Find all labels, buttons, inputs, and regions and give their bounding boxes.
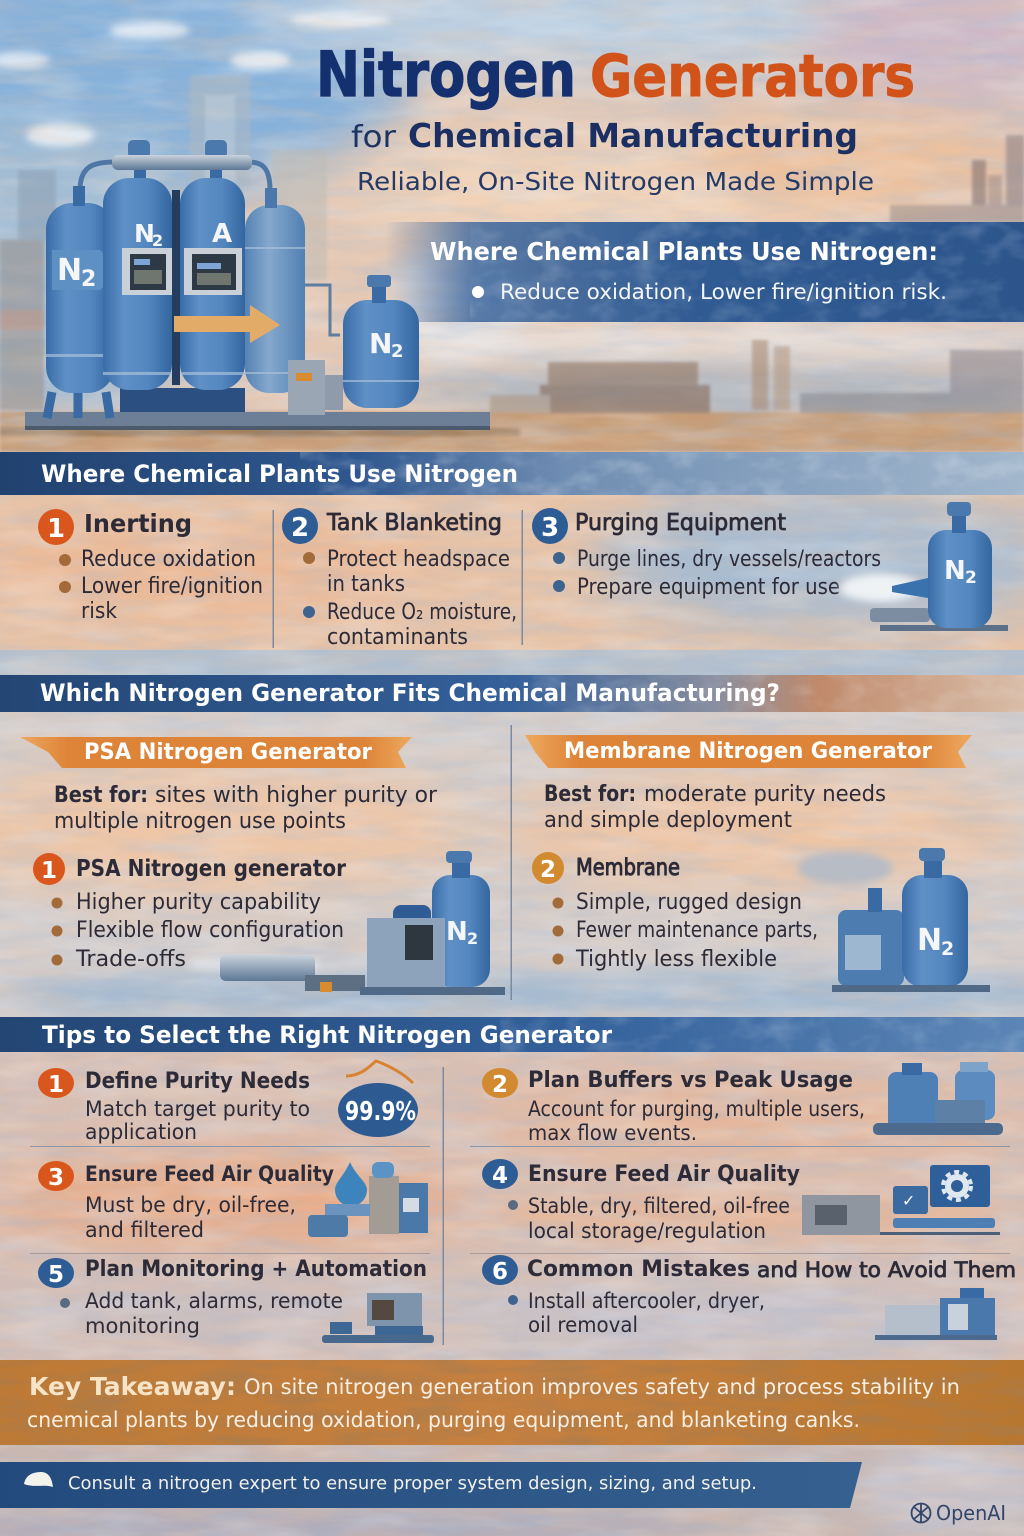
callout bullet: Reduce oxidation, Lower fire/ignition risk. [500, 280, 947, 304]
icon: controller and monitor [802, 1165, 1000, 1235]
title: Nitrogen [316, 38, 576, 111]
icon: monitoring unit [322, 1293, 434, 1343]
badge 2: 2 [291, 513, 309, 543]
tip 3: feed air: Ensure Feed Air Quality [85, 1162, 334, 1187]
tip 2: buffers [482, 1062, 1003, 1145]
icon: membrane unit: N [917, 923, 942, 958]
icon: PSA unit: 2 [467, 929, 478, 948]
icon: PSA generator skid [25, 140, 490, 430]
panel: purging equipment: Prepare equipment for use [577, 575, 840, 600]
best for: membrane: moderate purity needs [644, 782, 886, 807]
panel: tank blanketing: Protect headspace [327, 547, 510, 572]
section heading: tips [0, 1017, 1024, 1052]
panel: hero callout [385, 222, 1024, 322]
logo: OpenAI: OpenAI [936, 1501, 1006, 1525]
badge [38, 1068, 74, 1098]
section heading: tips: Tips to Select the Right Nitrogen Generator [42, 1021, 612, 1049]
panel: PSA generator [20, 737, 505, 995]
badge: 6 [492, 1259, 508, 1285]
control box [288, 285, 343, 415]
tip 3: feed air: Must be dry, oil-free, [85, 1193, 296, 1217]
badge 2 [282, 508, 318, 544]
small tank: 2 [391, 341, 404, 362]
panel: tank blanketing [282, 508, 517, 650]
tank 1: N [57, 253, 82, 288]
badge 3 [532, 508, 568, 544]
tip 4: feed air: Ensure Feed Air Quality [528, 1162, 800, 1187]
badge: 5 [48, 1262, 64, 1288]
tip 1: purity: Match target purity to [85, 1097, 310, 1121]
panel: membrane generator: Fewer maintenance parts, [576, 918, 818, 943]
best for: PSA: multiple nitrogen use points [54, 809, 346, 834]
badge: 3 [48, 1165, 64, 1191]
section heading: where plants use nitrogen: Where Chemical Plants Use Nitrogen [41, 460, 518, 488]
badge [482, 1159, 518, 1189]
tip 5: monitoring: Plan Monitoring + Automation [85, 1257, 427, 1282]
panel: membrane generator: Simple, rugged design [576, 890, 802, 915]
ribbon: PSA: PSA Nitrogen Generator [84, 740, 372, 765]
best for: PSA: sites with higher purity or [155, 783, 438, 808]
icon: aftercooler [875, 1288, 997, 1340]
section heading: which generator: Which Nitrogen Generator Fits Chemical Manufacturing? [40, 679, 780, 707]
tip 3: feed air: and filtered [85, 1218, 204, 1242]
badge [38, 1258, 74, 1288]
tip 2: buffers: Account for purging, multiple users, [528, 1097, 865, 1121]
subtitle: Chemical Manufacturing [408, 116, 858, 155]
icon: hard hat [24, 1472, 53, 1487]
panel: inerting [38, 509, 263, 624]
panel: membrane generator: Membrane [576, 855, 680, 881]
icon: membrane unit [797, 848, 990, 992]
icon: controller and monitor: ✓ [902, 1191, 915, 1210]
tip 5: monitoring: monitoring [85, 1314, 200, 1338]
section heading: where plants use nitrogen [0, 452, 1024, 495]
panel: footer note: Consult a nitrogen expert to ensure proper system design, sizing, and setup. [68, 1473, 757, 1494]
ribbon: membrane [525, 735, 972, 768]
icon: 99.9% badge: 99.9% [345, 1097, 416, 1127]
badge: 4 [492, 1163, 508, 1189]
best for: membrane: Best for: [544, 782, 636, 807]
badge [38, 1161, 74, 1191]
panel: footer note [0, 1462, 862, 1508]
tank 2: 2 [152, 231, 163, 250]
ribbon: membrane: Membrane Nitrogen Generator [564, 739, 932, 764]
panel: tank blanketing: contaminants [327, 625, 468, 650]
icon: purge tank: N [944, 556, 966, 586]
icon: PSA unit [190, 851, 505, 995]
panel: key takeaway: Key Takeaway: [29, 1372, 236, 1401]
tip 6: common mistakes: Install aftercooler, dryer, [528, 1289, 765, 1313]
panel: PSA generator: Flexible flow configuration [76, 918, 344, 943]
panel: tank blanketing: in tanks [327, 572, 405, 597]
tip 3: feed air [38, 1161, 428, 1242]
panel: tank blanketing: Reduce O₂ moisture, [327, 600, 517, 625]
callout heading: Where Chemical Plants Use Nitrogen: [430, 237, 938, 266]
gear [943, 1172, 971, 1200]
panel: inerting: risk [81, 599, 117, 624]
panel: inerting: Inerting [84, 509, 192, 538]
tip 5: monitoring [38, 1257, 434, 1343]
tip 6: common mistakes: and How to Avoid Them [757, 1258, 1016, 1282]
tip 6: common mistakes [482, 1255, 1016, 1340]
badge 2: 2 [540, 857, 556, 883]
tip 4: feed air: local storage/regulation [528, 1219, 766, 1243]
badge: 1 [48, 1072, 64, 1098]
panel: key takeaway: cnemical plants by reducing oxidation, purging equipment, and blanketing canks. [27, 1408, 860, 1432]
panel: purging equipment [532, 502, 1008, 631]
clouds [0, 12, 390, 147]
tip 6: common mistakes: Common Mistakes [527, 1257, 750, 1282]
panel: PSA generator: PSA Nitrogen generator [76, 856, 347, 882]
panel: PSA generator: Trade-offs [75, 947, 186, 972]
tank 1 [46, 186, 120, 393]
panel: purging equipment: Purge lines, dry vessels/reactors [577, 547, 881, 572]
best for: PSA: Best for: [54, 783, 148, 808]
tagline: Reliable, On-Site Nitrogen Made Simple [357, 167, 874, 196]
panel: inerting: Lower fire/ignition [81, 574, 263, 599]
panel: tank blanketing: Tank Blanketing [326, 510, 502, 536]
title: Generators [590, 42, 915, 110]
icon: purge tank [840, 502, 1008, 631]
panel: key takeaway: On site nitrogen generation improves safety and process stability in [244, 1375, 960, 1399]
badge [482, 1068, 518, 1098]
tip 4: feed air: Stable, dry, filtered, oil-free [528, 1194, 790, 1218]
background industrial skyline [0, 75, 1024, 413]
icon: PSA unit: N [446, 917, 468, 947]
icon: buffer tanks [873, 1062, 1003, 1135]
badge 1 [33, 853, 65, 885]
tank 2: N [134, 219, 155, 248]
tip 6: common mistakes: oil removal [528, 1313, 638, 1337]
subtitle: for [351, 120, 397, 155]
pipe header [80, 140, 270, 190]
badge: 2 [492, 1072, 508, 1098]
title [316, 38, 915, 111]
tip 2: buffers: max flow events. [528, 1121, 697, 1145]
panel: key takeaway [0, 1360, 1024, 1445]
badge 1: 1 [41, 858, 57, 884]
tip 1: purity [38, 1061, 418, 1144]
ribbon: PSA [20, 737, 412, 768]
icon: 99.9% badge [338, 1061, 418, 1137]
best for: membrane [544, 782, 886, 833]
small tank: N [369, 327, 392, 360]
icon: drop and filter [308, 1162, 428, 1237]
tank 2 [103, 178, 172, 390]
legs [47, 392, 110, 418]
badge 2 [532, 852, 564, 884]
tank 3 [180, 178, 245, 390]
badge 1: 1 [47, 514, 65, 544]
tip 4: feed air [482, 1159, 1000, 1243]
icon: membrane unit: 2 [941, 938, 954, 960]
tank 4 [245, 188, 305, 393]
badge 1 [38, 509, 74, 545]
panel: purging equipment: Purging Equipment [575, 510, 786, 536]
best for: membrane: and simple deployment [544, 808, 792, 833]
panel: PSA generator: Higher purity capability [76, 890, 321, 915]
section heading: which generator [0, 675, 1024, 712]
tank 3: A [212, 219, 232, 249]
panel: membrane generator [525, 735, 990, 992]
tip 2: buffers: Plan Buffers vs Peak Usage [528, 1068, 853, 1093]
panel: membrane generator: Tightly less flexible [575, 947, 777, 972]
panel: inerting: Reduce oxidation [81, 547, 256, 572]
icon: purge tank: 2 [965, 568, 977, 588]
arrow [174, 305, 280, 343]
best for: PSA [54, 783, 438, 834]
small tank [343, 275, 419, 408]
tip 1: purity: Define Purity Needs [85, 1069, 310, 1094]
tip 1: purity: application [85, 1120, 197, 1144]
tip 5: monitoring: Add tank, alarms, remote [85, 1289, 343, 1313]
tank 1: 2 [81, 267, 96, 292]
badge 3: 3 [541, 513, 559, 543]
badge [482, 1255, 518, 1285]
